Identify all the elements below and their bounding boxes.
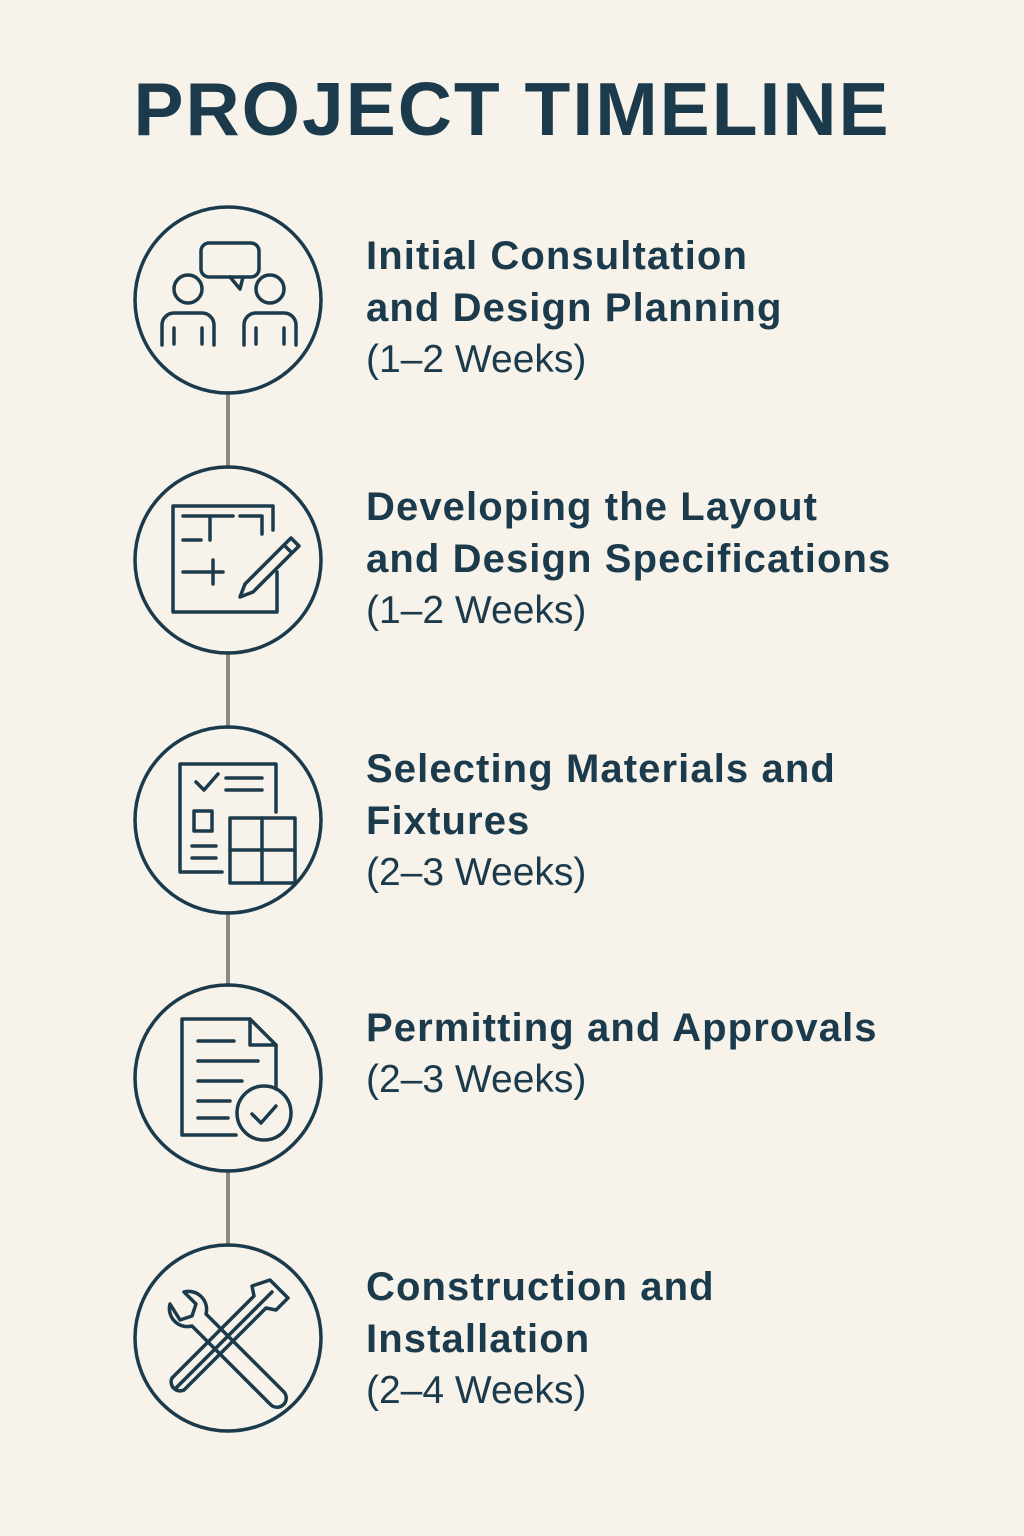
connectors <box>226 393 230 1245</box>
step 2 text: Developing the Layout <box>366 485 818 529</box>
step 2 text <box>366 485 891 632</box>
icon: consultation <box>135 207 321 393</box>
step 4 text: Permitting and Approvals <box>366 1006 878 1050</box>
step 2 text: and Design Specifications <box>366 537 891 581</box>
step 3 text: (2–3 Weeks) <box>366 851 586 894</box>
icon: materials <box>135 727 321 913</box>
step 4 text: (2–3 Weeks) <box>366 1058 586 1101</box>
title: PROJECT TIMELINE <box>133 67 891 151</box>
icon: permit <box>135 985 321 1171</box>
step 3 text: Selecting Materials and <box>366 747 836 791</box>
step 1 text: (1–2 Weeks) <box>366 338 586 381</box>
step 5 text: Installation <box>366 1317 590 1361</box>
step 3 text <box>366 747 836 894</box>
step 5 text <box>366 1265 715 1412</box>
icon: layout <box>135 467 321 653</box>
step 4 text <box>366 1006 878 1101</box>
step 5 text: (2–4 Weeks) <box>366 1369 586 1412</box>
step 1 text <box>366 234 782 381</box>
icon: tools <box>135 1245 321 1431</box>
step 5 text: Construction and <box>366 1265 715 1309</box>
step 2 text: (1–2 Weeks) <box>366 589 586 632</box>
step 1 text: and Design Planning <box>366 286 782 330</box>
step 1 text: Initial Consultation <box>366 234 748 278</box>
step 3 text: Fixtures <box>366 799 530 843</box>
